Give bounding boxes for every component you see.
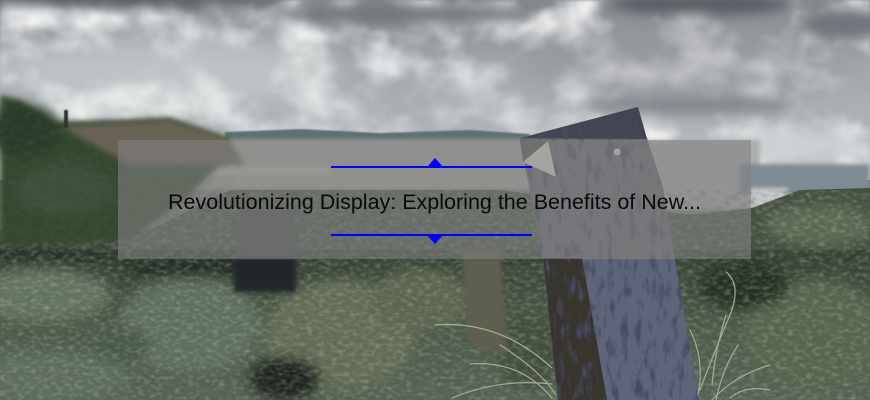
icon: up triangle: [427, 158, 443, 167]
foreground fence post: [515, 105, 705, 400]
top divider line: [331, 166, 532, 168]
triangular marker on post: [520, 140, 556, 177]
distant hills and sea: [180, 129, 870, 210]
sky with clouds: [0, 0, 870, 180]
bottom divider line: [331, 234, 532, 236]
foreground grass blades: [435, 272, 770, 400]
left hillside: [0, 95, 245, 250]
title: Revolutionizing Display: Exploring the Benefits of New...: [168, 190, 701, 214]
panel: translucent title banner: [118, 140, 751, 259]
icon: down triangle: [427, 235, 443, 244]
back fence posts: [234, 205, 507, 355]
grass field: [0, 188, 870, 400]
